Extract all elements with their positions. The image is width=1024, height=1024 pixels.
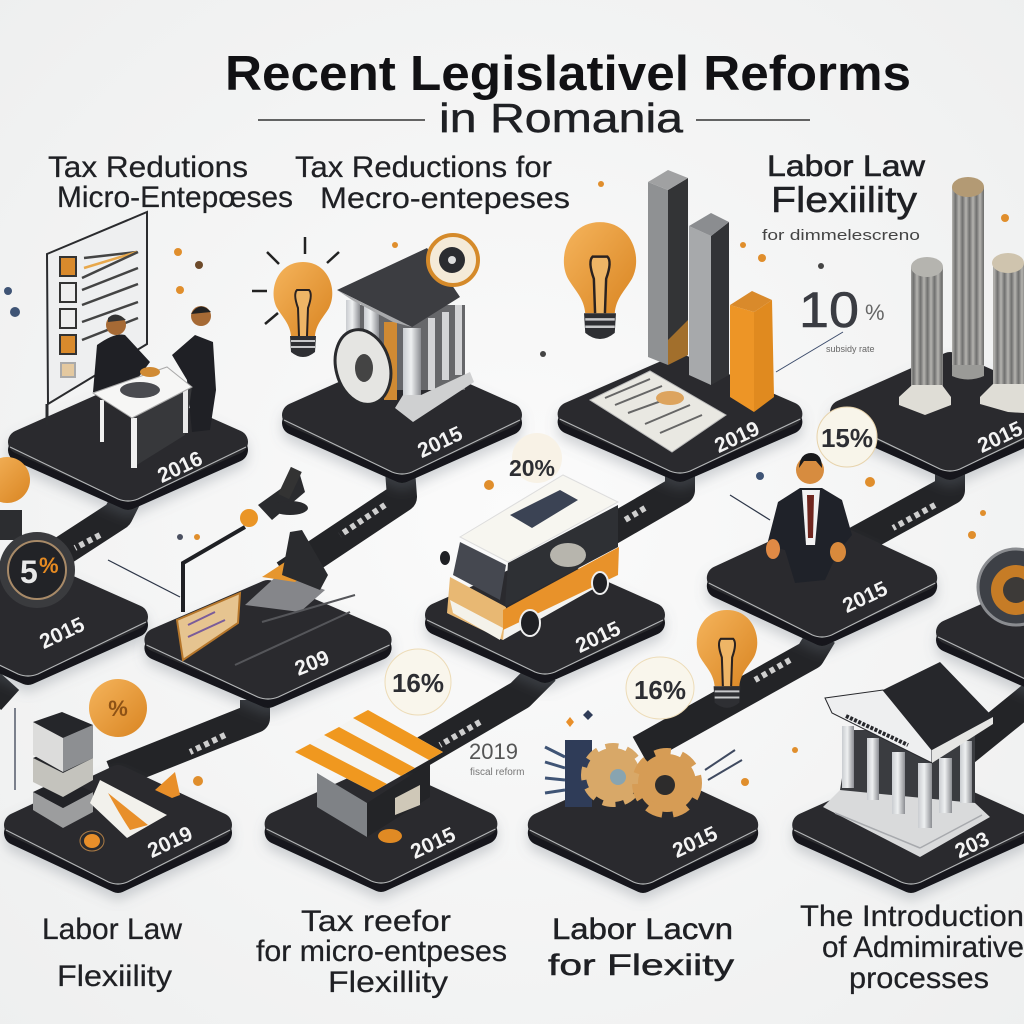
caption: labor law for flexibility: for Flexiity	[548, 949, 734, 982]
icon: light bulb	[564, 222, 636, 339]
stat: 10%: %	[865, 300, 885, 325]
icon: orange coin	[89, 679, 147, 737]
icon: bank building with coin	[327, 235, 478, 422]
title: Recent Legislativel Reforms	[225, 47, 911, 101]
icon: document with orange curve	[90, 780, 167, 838]
icon: government building	[823, 662, 993, 857]
caption: tax reform micro-enterprises: for micro-entpeses	[256, 935, 507, 968]
heading: labor law flexibility top right	[762, 150, 925, 244]
caption: labor law flexibility: Labor Law	[42, 913, 182, 946]
heading: tax reductions micro-enterprises left: Tax Redutions	[48, 151, 248, 184]
caption: tax reform micro-enterprises: Flexillity	[328, 966, 448, 999]
platform 11	[267, 649, 524, 883]
platform 3	[560, 170, 885, 473]
platform 7	[427, 433, 663, 674]
caption: labor law for flexibility	[548, 913, 734, 982]
year label: 2019	[711, 417, 763, 458]
title	[225, 47, 911, 141]
caption: introduction of administrative processes: processes	[849, 962, 989, 995]
year label: 2016	[154, 447, 206, 488]
year label: 2015	[407, 823, 460, 864]
icon: bus	[440, 475, 619, 640]
caption: labor law for flexibility: Labor Lacvn	[552, 913, 733, 946]
icon: columns	[899, 177, 1024, 415]
caption: labor law flexibility: Flexiility	[57, 960, 172, 993]
icon: gavel and machine	[177, 467, 355, 665]
icon: orange coin	[0, 457, 30, 503]
year label: 209	[292, 646, 333, 681]
small orange markers	[80, 772, 180, 851]
stat: 10%: subsidy rate	[826, 344, 875, 354]
platform 1	[10, 212, 246, 501]
platform 5	[0, 457, 146, 676]
stat: 15% badge	[817, 407, 877, 467]
title: in Romania	[439, 95, 683, 141]
icon: businessman	[766, 453, 852, 583]
platform 10	[6, 679, 230, 884]
platform 12	[530, 610, 757, 884]
year label: 2019	[144, 822, 196, 863]
icon: percent gauge: 5	[20, 554, 38, 590]
stat: percent badge: 20%	[509, 455, 555, 481]
icon: two businessmen at table	[93, 306, 216, 468]
stat: 16% badge	[385, 649, 451, 715]
icon: shop with striped awning	[295, 710, 443, 843]
year label: 2015	[414, 422, 467, 463]
platform 9	[938, 549, 1024, 691]
caption: introduction of administrative processes: The Introduction	[800, 900, 1024, 933]
caption: introduction of administrative processes: of Admimirative	[822, 931, 1024, 964]
icon: light bulb	[697, 610, 757, 708]
stat: 15% badge: 15%	[821, 423, 873, 453]
year label: 203	[951, 828, 993, 863]
bar chart	[648, 170, 774, 412]
platform 6	[146, 467, 390, 699]
stat: 16% badge	[626, 657, 694, 719]
stat: 10%: 10	[799, 282, 859, 338]
heading: labor law flexibility top right: Flexiility	[771, 179, 917, 220]
year label: 2015	[572, 617, 625, 658]
icon: percent gauge: %	[39, 553, 59, 578]
stat: 16% badge: 16%	[392, 668, 444, 698]
icon: orange coin: %	[108, 696, 128, 721]
platform 4	[832, 177, 1024, 471]
heading: tax reductions micro-enterprises left: Micro-Entepœses	[57, 181, 293, 214]
connector paths between platforms	[0, 465, 1024, 775]
heading: labor law flexibility top right: Labor Law	[767, 150, 925, 183]
caption: labor law flexibility	[42, 913, 182, 993]
icon: stacked books	[33, 712, 93, 828]
stat: percent badge	[509, 433, 562, 483]
platform 8	[709, 407, 935, 637]
icon: book and gears	[545, 710, 742, 812]
icon: light bulb	[252, 237, 339, 357]
accent dots	[4, 181, 1009, 786]
label: 2019	[469, 739, 524, 778]
year label: 2015	[36, 613, 89, 654]
stat: 16% badge: 16%	[634, 675, 686, 705]
label: 2019: fiscal reform	[470, 767, 524, 778]
heading: tax reductions macro-enterprises	[295, 151, 570, 215]
year label: 2015	[839, 577, 892, 618]
heading: tax reductions micro-enterprises left	[48, 151, 293, 214]
icon: document on platform	[590, 371, 726, 452]
year label: 2015	[669, 822, 722, 863]
icon: percent gauge	[0, 510, 75, 608]
caption: tax reform micro-enterprises	[256, 905, 507, 999]
label: 2019: 2019	[469, 739, 518, 764]
caption: tax reform micro-enterprises: Tax reefor	[301, 905, 451, 938]
heading: tax reductions macro-enterprises: Tax Reductions for	[295, 151, 552, 184]
heading: tax reductions macro-enterprises: Mecro-entepeses	[320, 182, 570, 215]
icon: checklist board	[47, 212, 147, 425]
stat: 10%	[776, 282, 885, 372]
caption: introduction of administrative processes	[800, 900, 1024, 995]
heading: labor law flexibility top right: for dimmelescreno	[762, 227, 920, 244]
icon: globe coin	[978, 549, 1024, 625]
platform 2	[252, 235, 520, 474]
platform 13	[794, 662, 1024, 884]
